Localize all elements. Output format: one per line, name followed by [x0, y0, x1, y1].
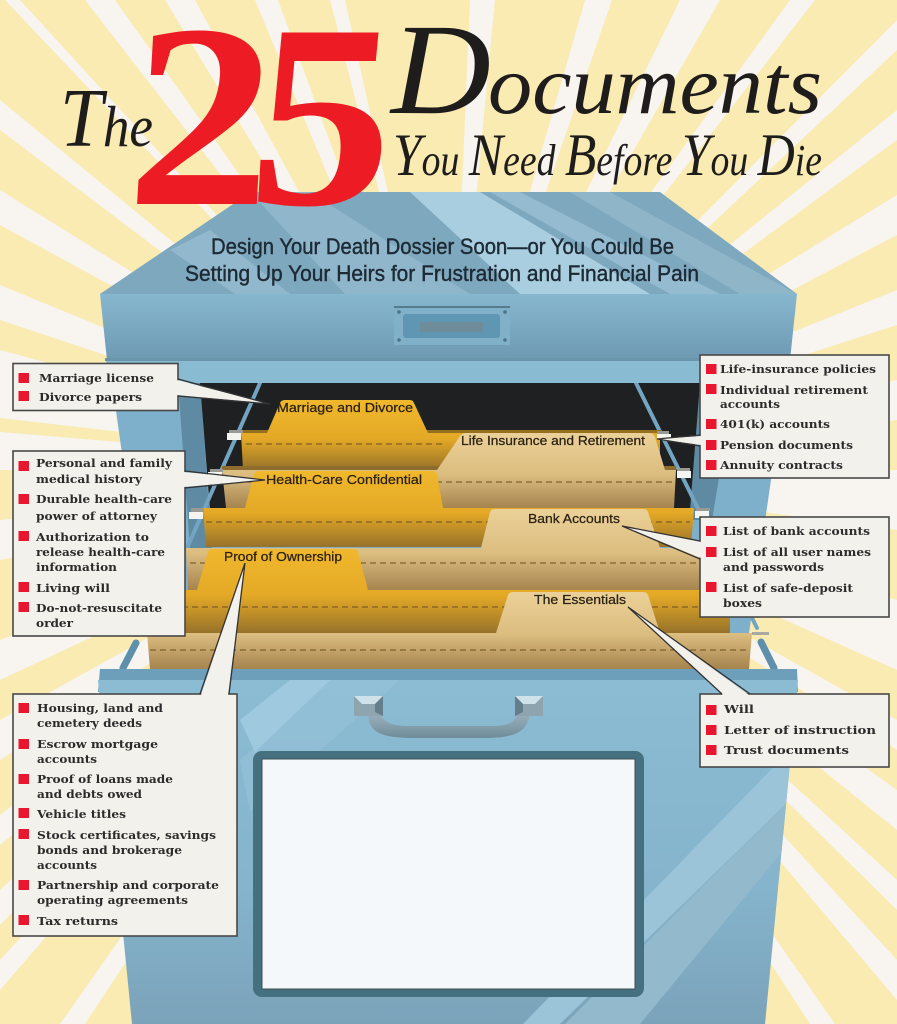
title word: The: The — [60, 72, 153, 165]
callout: The Essentials documents: Will — [723, 702, 755, 716]
icon: cabinet side walls — [112, 382, 785, 640]
title line: You Need Before You Die: You Need Before You Die — [393, 122, 822, 188]
title — [60, 0, 822, 262]
callout: Marriage and Divorce documents: Marriage license — [39, 371, 154, 385]
drawer top face — [100, 192, 797, 294]
callout: Bank Accounts documents: List of all user names — [723, 545, 871, 559]
top drawer — [100, 192, 797, 383]
title word: Documents — [389, 0, 822, 142]
callout: The Essentials documents: Trust documents — [724, 743, 849, 757]
callout: Bank Accounts documents: List of bank accounts — [723, 524, 870, 538]
callout: Bank Accounts documents: boxes — [723, 596, 762, 610]
callout: The Essentials documents: Letter of instruction — [724, 723, 877, 737]
icon: hanging rails — [123, 383, 774, 668]
tab label: Proof of Ownership: Proof of Ownership — [224, 549, 342, 564]
subtitle: Design Your Death Dossier Soon—or You Could Be — [211, 234, 674, 259]
callout: Life Insurance and Retirement documents — [657, 355, 889, 478]
tab label: Marriage and Divorce: Marriage and Divorce — [277, 400, 413, 415]
callout: Bank Accounts documents: List of safe-deposit — [723, 581, 854, 595]
callout: Health-care documents: information — [36, 560, 118, 574]
subtitle: Setting Up Your Heirs for Frustration and Financial Pain — [185, 261, 699, 286]
title word: Documents: ocuments — [488, 39, 822, 132]
callout: Life Insurance and Retirement documents: Pension documents — [720, 438, 853, 452]
callout: Health-care documents: Personal and family — [36, 456, 172, 470]
callout: Proof of Ownership documents: Escrow mortgage — [37, 737, 158, 751]
folder: Proof of Ownership — [178, 549, 730, 633]
callout: Life Insurance and Retirement documents: 401(k) accounts — [720, 417, 830, 431]
callout: Proof of Ownership documents: Proof of loans made — [37, 772, 173, 786]
bottom drawer — [98, 669, 800, 1024]
title word: Documents: D — [389, 0, 491, 142]
callout: Life Insurance and Retirement documents: Individual retirement — [720, 383, 869, 397]
tab label: Bank Accounts: Bank Accounts — [528, 511, 621, 526]
callout: Proof of Ownership documents: accounts — [37, 858, 97, 872]
tab label: Life Insurance and Retirement: Life Insurance and Retirement — [461, 433, 645, 448]
callout: Proof of Ownership documents: and debts owed — [37, 787, 142, 801]
tab label: The Essentials: The Essentials — [534, 592, 627, 607]
callout: Health-care documents: Do-not-resuscitate — [36, 601, 162, 615]
callout: Health-care documents: order — [36, 616, 74, 630]
folder: Bank Accounts — [186, 509, 715, 590]
callout: Health-care documents: Authorization to — [35, 530, 149, 544]
folder: Life Insurance and Retirement — [222, 433, 676, 508]
callout: Proof of Ownership documents: Partnership and corporate — [37, 878, 219, 892]
callout: Health-care documents — [13, 451, 265, 636]
callout: The Essentials documents — [628, 607, 889, 767]
callout: Life Insurance and Retirement documents: accounts — [720, 397, 780, 411]
title number: 25 — [122, 0, 408, 262]
label window — [253, 751, 644, 997]
callout: Proof of Ownership documents: Tax returns — [37, 914, 118, 928]
icon: drawer label plate — [394, 306, 510, 345]
callout: Life Insurance and Retirement documents: Life-insurance policies — [720, 362, 876, 376]
tab label: Health-Care Confidential: Health-Care Confidential — [266, 472, 422, 487]
drawer lip — [98, 669, 798, 692]
callout: Proof of Ownership documents: operating agreements — [37, 893, 188, 907]
callout: Proof of Ownership documents: Vehicle titles — [36, 807, 126, 821]
callout: Proof of Ownership documents: cemetery deeds — [37, 716, 142, 730]
drawer front — [98, 680, 800, 1024]
callout: Proof of Ownership documents: Housing, land and — [37, 701, 163, 715]
callout: Marriage and Divorce documents: Divorce papers — [39, 390, 142, 404]
callout: Health-care documents: power of attorney — [36, 509, 157, 523]
folder: The Essentials — [147, 592, 752, 669]
callout: Bank Accounts documents: and passwords — [723, 560, 824, 574]
callout: Proof of Ownership documents — [13, 563, 245, 936]
callout: Proof of Ownership documents: accounts — [37, 752, 97, 766]
drawer front — [100, 294, 797, 360]
callout: Life Insurance and Retirement documents: Annuity contracts — [719, 458, 843, 472]
subtitle — [185, 234, 699, 286]
folder: Marriage and Divorce — [241, 400, 661, 470]
folder: Health-Care Confidential — [203, 471, 694, 547]
callout: Health-care documents: Durable health-care — [36, 492, 172, 506]
callout: Health-care documents: Living will — [36, 581, 111, 595]
icon: drawer handle — [354, 696, 543, 738]
callout: Proof of Ownership documents: bonds and brokerage — [37, 843, 182, 857]
callout: Health-care documents: medical history — [36, 472, 142, 486]
callout: Health-care documents: release health-care — [36, 545, 165, 559]
callout: Marriage and Divorce documents — [13, 364, 270, 410]
callout: Proof of Ownership documents: Stock certificates, savings — [37, 828, 216, 842]
callout: Bank Accounts documents — [622, 517, 889, 617]
icon: rail hangers — [189, 430, 769, 635]
